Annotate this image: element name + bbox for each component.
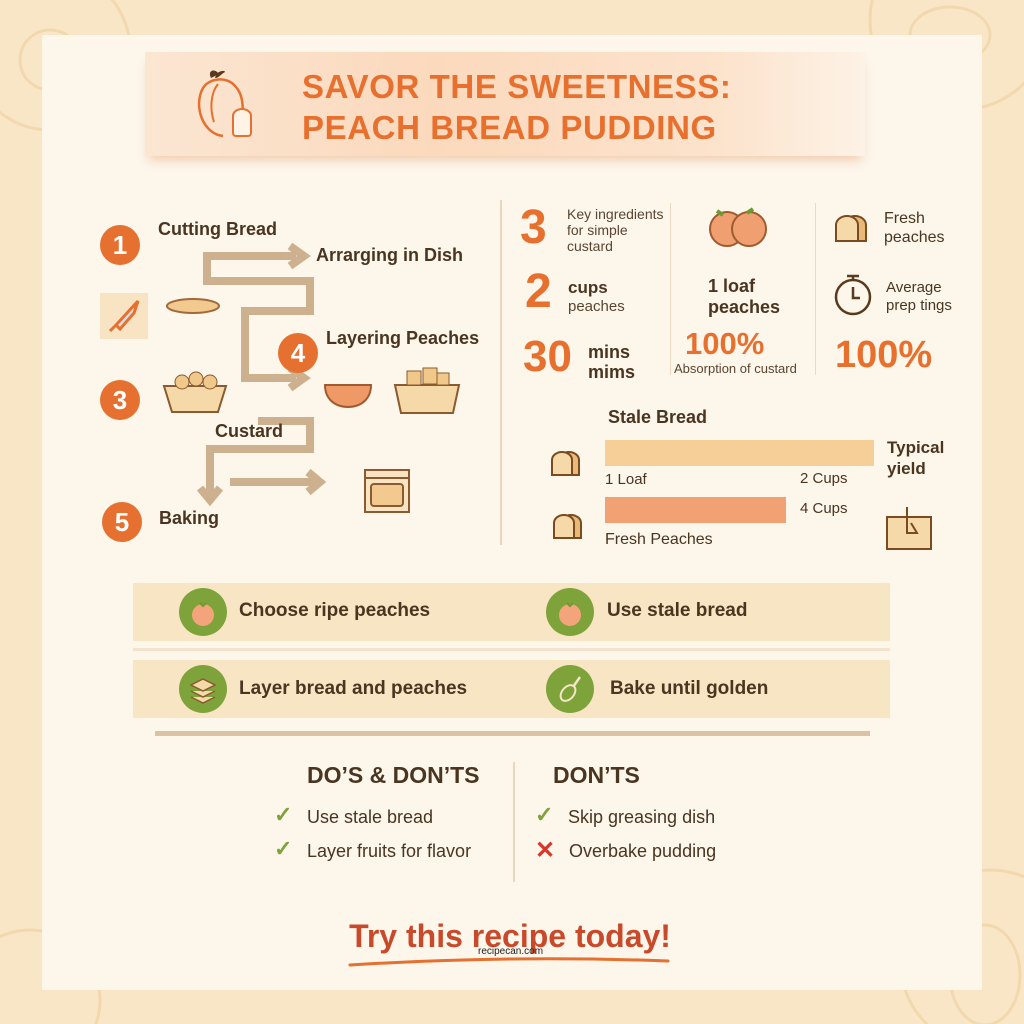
- panel: key stats: [520, 201, 952, 382]
- title text: [302, 68, 731, 146]
- arrows: [197, 242, 326, 506]
- bar chart: Typical: [887, 438, 944, 457]
- panel: key stats: prep tings: [886, 297, 952, 314]
- panel: do's & don'ts: DO’S & DON’TS: [307, 762, 480, 788]
- icon: peach slice & dish: [324, 368, 460, 414]
- icon: baguette: [166, 298, 220, 314]
- panel: key stats: Fresh: [884, 210, 925, 227]
- panel: key stats: 30: [523, 332, 572, 381]
- panel: do's & don'ts: [274, 762, 716, 882]
- icon: bread: [835, 215, 867, 242]
- icon: peaches: [709, 207, 767, 247]
- bar chart: 1 Loaf: [605, 471, 647, 488]
- panel: key stats: custard: [567, 238, 613, 254]
- icon: knife: [100, 293, 148, 339]
- step 1: 1: [113, 230, 127, 260]
- step 4: [278, 333, 318, 373]
- panel: key stats: 100%: [685, 326, 764, 361]
- panel: tips: Layer bread and peaches: [239, 678, 467, 699]
- bar chart: 2 Cups: [800, 470, 848, 487]
- icon: stopwatch: [834, 274, 872, 316]
- panel: key stats: 1 loaf: [708, 276, 755, 296]
- call to action: recipecan.com: [478, 946, 543, 957]
- bar chart: yield: [887, 459, 926, 478]
- panel: do's & don'ts: ✓: [274, 836, 292, 861]
- step 3: 3: [113, 385, 127, 415]
- divider: [155, 731, 870, 736]
- panel: key stats: Key ingredients: [567, 206, 664, 222]
- panel: steps flow: Arrarging in Dish: [316, 245, 463, 265]
- panel: key stats: 2: [525, 265, 552, 318]
- step 5: [102, 502, 142, 542]
- panel: tips: Use stale bread: [607, 600, 747, 621]
- panel: key stats: for simple: [567, 222, 628, 238]
- title text: SAVOR THE SWEETNESS:: [302, 68, 731, 105]
- panel: key stats: peaches: [884, 229, 944, 246]
- panel: key stats: mins: [588, 342, 630, 362]
- panel: key stats: Average: [886, 279, 942, 296]
- title text: PEACH BREAD PUDDING: [302, 109, 717, 146]
- divider: [500, 200, 502, 545]
- icon: oven: [364, 469, 410, 513]
- panel: do's & don'ts: Layer fruits for flavor: [307, 841, 471, 861]
- panel: key stats: 100%: [835, 334, 932, 376]
- panel: do's & don'ts: ✓: [274, 802, 292, 827]
- panel: do's & don'ts: Use stale bread: [307, 807, 433, 827]
- panel: do's & don'ts: Skip greasing dish: [568, 807, 715, 827]
- icon: peach and bread: [198, 70, 252, 138]
- panel: steps flow: [100, 219, 479, 542]
- call to action: Try this recipe today!: [349, 918, 671, 954]
- panel: key stats: peaches: [568, 298, 625, 315]
- step 3: [100, 380, 140, 420]
- panel: steps flow: Baking: [159, 508, 219, 528]
- panel: tips: Bake until golden: [610, 678, 768, 699]
- step 5: 5: [115, 507, 129, 537]
- panel: do's & don'ts: ✕: [535, 837, 555, 864]
- panel: key stats: cups: [568, 278, 608, 297]
- title banner: [145, 52, 865, 156]
- panel: key stats: Absorption of custard: [674, 361, 797, 376]
- panel: tips: [133, 583, 890, 718]
- panel: do's & don'ts: DON’TS: [553, 762, 640, 788]
- bar chart: 4 Cups: [800, 500, 848, 517]
- panel: steps flow: Custard: [215, 421, 283, 441]
- step 1: [100, 225, 140, 265]
- bar chart: Stale Bread: [608, 407, 707, 427]
- panel: steps flow: Cutting Bread: [158, 219, 277, 239]
- tip icons: [179, 588, 227, 636]
- step 4: 4: [291, 338, 305, 368]
- panel: do's & don'ts: ✓: [535, 802, 553, 827]
- bar chart: Fresh Peaches: [605, 531, 713, 548]
- panel: key stats: peaches: [708, 297, 780, 317]
- panel: do's & don'ts: Overbake pudding: [569, 841, 716, 861]
- panel: steps flow: Layering Peaches: [326, 328, 479, 348]
- panel: key stats: 3: [520, 201, 547, 254]
- panel: tips: Choose ripe peaches: [239, 600, 430, 621]
- bar chart: [551, 407, 944, 550]
- icon: dish: [162, 372, 228, 413]
- panel: key stats: mims: [588, 362, 635, 382]
